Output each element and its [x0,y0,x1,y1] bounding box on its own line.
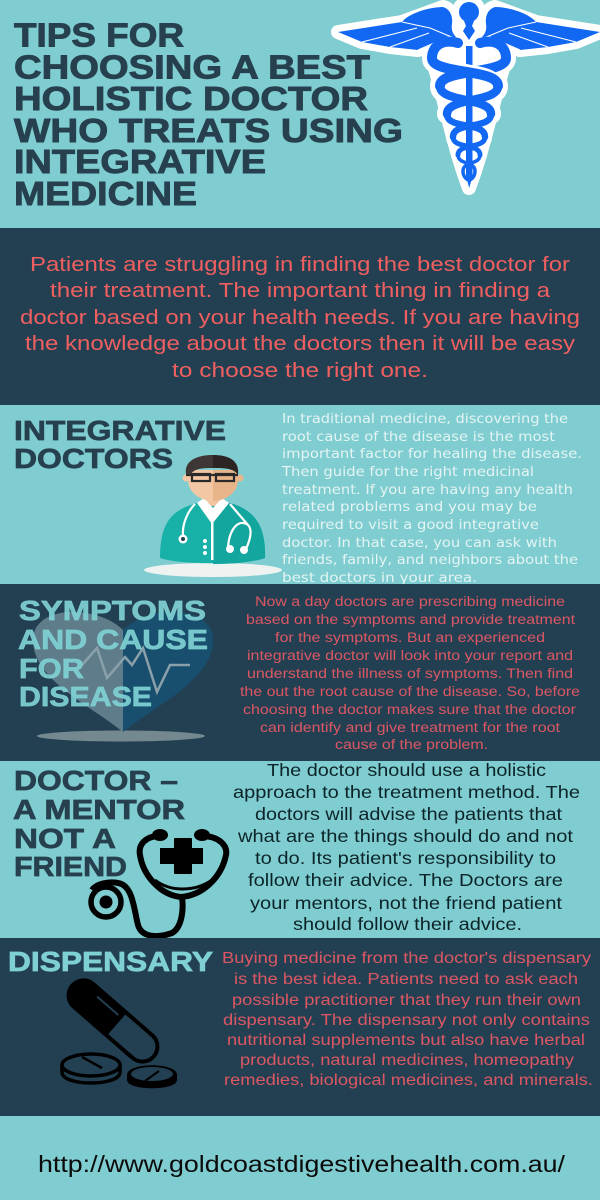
title: WHO TREATS USING [14,113,403,150]
body text: integrative doctors: root cause of the disease is the most [282,429,555,445]
title: TIPS FOR [14,18,184,54]
title: HOLISTIC DOCTOR [14,81,368,118]
body text: dispensary: remedies, biological medicines, and minerals. [224,1072,593,1089]
heading: integrative doctors: DOCTORS [14,443,173,474]
heading: symptoms and cause for disease: FOR [19,653,84,684]
body text: doctor a mentor: follow their advice. The Doctors are [248,870,563,890]
body text: dispensary: products, natural medicines, homeopathy [240,1052,574,1069]
body text: symptoms and cause: understand the illness of symptoms. Then find [247,666,573,681]
body text: dispensary: dispensary. The dispensary not only contains [223,1012,590,1029]
body text: integrative doctors: related problems and you may be [282,499,537,515]
heading: dispensary: DISPENSARY [8,946,213,977]
body text: doctor a mentor: should follow their advice. [293,914,522,934]
heading: doctor a mentor not a friend [13,765,185,882]
heading: symptoms and cause for disease: DISEASE [19,681,152,712]
body text: integrative doctors: doctor. In that case, you can ask with [282,535,557,551]
panel: header band [0,0,600,228]
panel: dispensary [0,938,600,1116]
body text: integrative doctors: important factor for healing the disease. [282,446,582,462]
heading: doctor a mentor not a friend: DOCTOR – [14,765,178,796]
heading: doctor a mentor not a friend: NOT A [14,823,116,854]
introduction text: Patients are struggling in finding the best doctor for [30,254,570,276]
body text: doctor a mentor [233,760,580,934]
body text: integrative doctors: Then guide for the right medicinal [281,464,534,480]
body text: symptoms and cause: choosing the doctor makes sure that the doctor [243,702,577,717]
body text: dispensary [222,950,593,1089]
body text: integrative doctors: required to visit a good integrative [282,517,539,533]
body text: symptoms and cause [240,594,580,752]
body text: dispensary: nutritional supplements but also have herbal [227,1032,585,1049]
body text: dispensary: possible practitioner that they run their own [232,992,581,1009]
body text: integrative doctors: friends, family, and neighbors about the [282,552,578,568]
body text: doctor a mentor: to do. Its patient's responsibility to [255,848,556,868]
panel: doctor a mentor [0,760,600,938]
icon: doctor illustration [144,455,282,577]
icon: stethoscope [91,829,226,936]
icon: caduceus [338,2,600,188]
title: INTEGRATIVE [14,144,266,181]
body text: symptoms and cause: based on the symptoms and provide treatment [246,612,575,627]
body text: doctor a mentor: The doctor should use a holistic [267,760,546,780]
body text: doctor a mentor: what are the things should do and not [237,826,573,846]
body text: symptoms and cause: for the symptoms. But an experienced [275,630,545,645]
footer url: http://www.goldcoastdigestivehealth.com.au/ [38,1151,566,1177]
body text: dispensary: is the best idea. Patients need to ask each [234,971,578,988]
body text: integrative doctors: In traditional medicine, discovering the [282,411,568,427]
body text: doctor a mentor: your mentors, not the friend patient [250,893,562,913]
heading: symptoms and cause for disease: AND CAUSE [18,624,208,655]
panel: introduction [0,228,600,405]
heading: doctor a mentor not a friend: FRIEND [14,851,127,882]
icon: capsule and pills [62,974,177,1088]
heading: integrative doctors [14,415,226,474]
body text: integrative doctors [281,411,582,586]
introduction text [20,254,580,382]
introduction text: to choose the right one. [172,360,428,382]
body text: doctor a mentor: approach to the treatment method. The [233,782,580,802]
panel: symptoms and cause [0,584,600,761]
title: MEDICINE [14,176,197,213]
heading: symptoms and cause for disease [18,595,208,712]
heading: symptoms and cause for disease: SYMPTOMS [19,595,206,626]
body text: doctor a mentor: doctors will advise the patients that [255,804,562,824]
heading: doctor a mentor not a friend: A MENTOR [13,794,185,825]
body text: dispensary: Buying medicine from the doctor's dispensary [222,950,591,967]
panel: integrative doctors [0,405,600,586]
body text: symptoms and cause: Now a day doctors are prescribing medicine [255,594,565,609]
title: CHOOSING A BEST [14,50,371,86]
body text: symptoms and cause: the out the root cause of the disease. So, before [240,684,580,699]
heading: integrative doctors: INTEGRATIVE [14,415,226,446]
title [14,18,403,213]
introduction text: the knowledge about the doctors then it will be easy [25,333,575,355]
introduction text: their treatment. The important thing in finding a [50,280,551,302]
body text: symptoms and cause: integrative doctor will look into your report and [247,648,573,663]
body text: symptoms and cause: can identify and give treatment for the root [260,720,560,735]
introduction text: doctor based on your health needs. If you are having [20,307,580,329]
body text: symptoms and cause: cause of the problem. [335,737,488,752]
icon: heart with pulse [33,612,213,742]
body text: integrative doctors: treatment. If you are having any health [282,482,573,498]
body text: integrative doctors: best doctors in your area. [282,570,477,586]
